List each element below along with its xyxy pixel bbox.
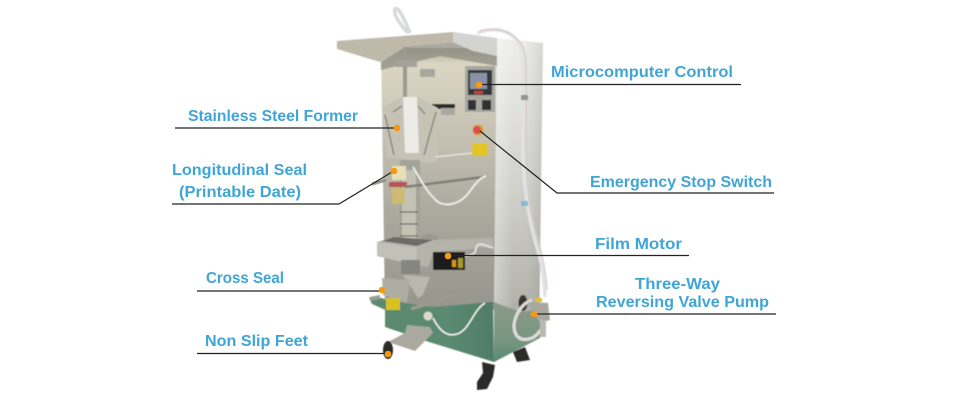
rail and seal wire xyxy=(372,180,386,184)
front panel xyxy=(381,48,497,310)
emergency stop button xyxy=(472,124,484,136)
film below tray xyxy=(401,260,420,274)
callout: film motor: Film Motor xyxy=(595,236,682,253)
callout: emergency stop switch xyxy=(480,131,774,193)
control panel plate xyxy=(465,66,495,112)
cross seal cover xyxy=(382,278,410,303)
callout: non slip feet xyxy=(197,333,391,357)
yellow warning label xyxy=(386,298,400,310)
callout: cross seal xyxy=(197,270,385,293)
motor cable xyxy=(465,244,493,256)
cross seal flap rear xyxy=(403,275,430,298)
side hoses xyxy=(477,30,545,297)
discharge chute xyxy=(388,325,433,351)
callout: film motor xyxy=(445,236,689,259)
callout: stainless steel former xyxy=(175,108,400,131)
callout: three-way reversing valve pump: Three-Way xyxy=(635,276,720,293)
callout: stainless steel former: Stainless Steel Former xyxy=(188,108,358,125)
cross seal ledge xyxy=(369,298,408,320)
film wheel xyxy=(420,234,438,244)
horizontal sealing bars xyxy=(370,297,380,299)
callout: emergency stop switch: Emergency Stop Switch xyxy=(590,174,772,191)
longitudinal seal xyxy=(392,166,406,180)
microcomputer screen xyxy=(468,70,492,95)
canopy left wing xyxy=(337,32,453,62)
stainless former xyxy=(383,97,438,163)
hose clamp xyxy=(521,95,528,100)
green cabinet front xyxy=(385,300,494,362)
gauge xyxy=(424,312,432,320)
rod brackets xyxy=(396,60,417,67)
film tube xyxy=(400,160,420,248)
callout: cross seal: Cross Seal xyxy=(206,270,284,287)
callout: non slip feet: Non Slip Feet xyxy=(205,333,309,350)
film roller xyxy=(432,104,455,109)
callout: three-way reversing valve pump xyxy=(531,276,776,317)
machine xyxy=(337,8,550,390)
callout: three-way reversing valve pump: Reversing Valve Pump xyxy=(596,294,769,311)
canopy underside shadow xyxy=(381,42,497,70)
small controllers xyxy=(468,100,476,110)
callout: longitudinal seal: Longitudinal Seal xyxy=(172,162,307,179)
side panel xyxy=(494,38,543,362)
green wire xyxy=(433,303,485,335)
feet xyxy=(383,341,393,359)
top hose loop xyxy=(395,8,410,33)
callout: longitudinal seal xyxy=(172,162,397,204)
vertical rod xyxy=(403,47,407,125)
green cabinet side xyxy=(494,302,540,362)
rails xyxy=(435,153,472,157)
cutter tray xyxy=(377,237,493,267)
canopy right wing xyxy=(453,32,497,56)
callout: microcomputer control: Microcomputer Control xyxy=(551,64,733,81)
callout: longitudinal seal: (Printable Date) xyxy=(179,184,301,201)
warning label xyxy=(472,143,488,156)
film motor xyxy=(433,252,465,270)
callout: microcomputer control xyxy=(476,64,741,88)
pump and hose xyxy=(518,295,528,311)
